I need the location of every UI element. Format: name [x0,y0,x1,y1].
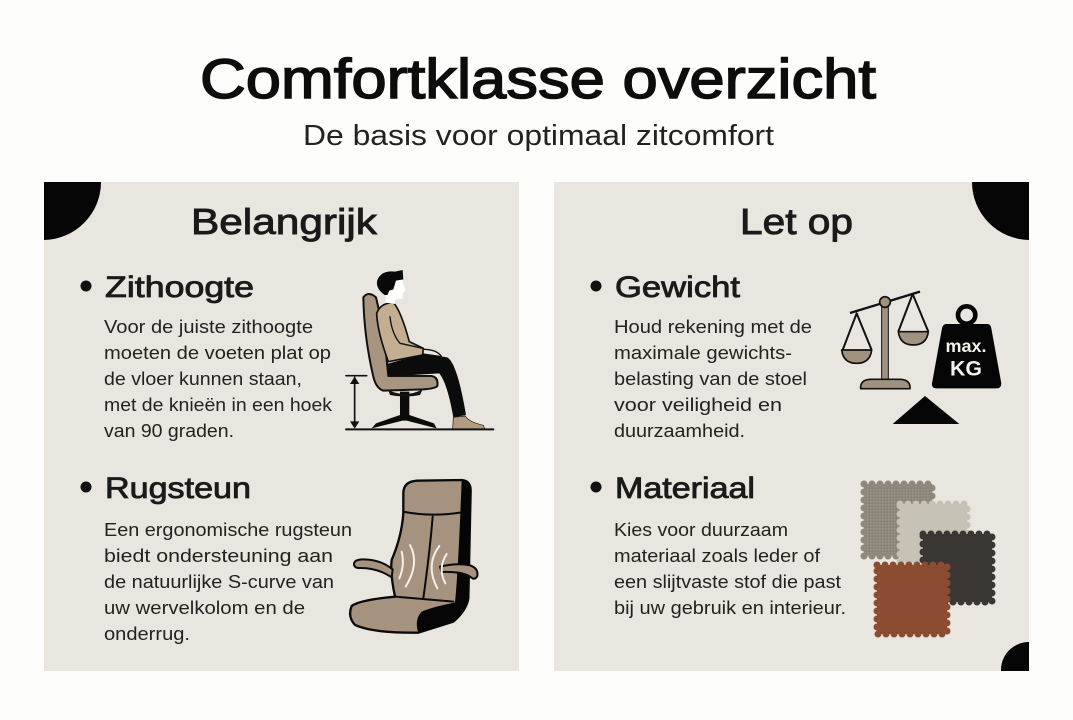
panel: Belangrijk [44,182,519,671]
section: Materiaal: materiaal zoals leder of [614,545,821,566]
section: Materiaal [590,472,846,618]
section: Zithoogte: van 90 graden. [104,420,234,441]
heading: Belangrijk: Belangrijk [191,201,378,242]
corner decoration top left [44,182,101,240]
icon: balance scale and max KG weight: KG [950,356,982,380]
icon: seated person on chair [346,270,493,429]
heading: Let op: Let op [740,201,853,242]
section: Zithoogte: moeten de voeten plat op [104,342,331,363]
subtitle: De basis voor optimaal zitcomfort [303,120,774,152]
title: Comfortklasse overzicht [200,47,876,110]
icon: fabric swatches [864,484,992,634]
icon: balance scale and max KG weight [842,292,1001,424]
section: Rugsteun [80,472,352,644]
section: Zithoogte: de vloer kunnen staan, [104,368,302,389]
section: Gewicht: voor veiligheid en [614,394,782,415]
icon: ergonomic chair back [350,480,477,633]
section: Gewicht: belasting van de stoel [614,368,807,389]
section: Gewicht: duurzaamheid. [614,420,745,441]
section: Materiaal: bij uw gebruik en interieur. [614,597,846,618]
section: Rugsteun: uw wervelkolom en de [104,597,305,618]
section: Rugsteun: Rugsteun [105,472,251,505]
section: Rugsteun: Een ergonomische rugsteun [104,519,352,540]
section: Zithoogte: met de knieën in een hoek [104,394,333,415]
section: Zithoogte: Zithoogte [105,271,254,304]
section: Rugsteun: de natuurlijke S-curve van [104,571,334,592]
section: Materiaal: Kies voor duurzaam [614,519,788,540]
section: Zithoogte: Voor de juiste zithoogte [104,316,313,337]
icon: balance scale and max KG weight: max. [945,336,986,356]
corner decoration bottom right [1001,642,1029,671]
section: Gewicht: Gewicht [615,271,741,304]
section: Zithoogte [80,271,333,441]
section: Materiaal: een slijtvaste stof die past [614,571,841,592]
section: Materiaal: Materiaal [615,472,755,505]
section: Rugsteun: biedt ondersteuning aan [104,545,333,566]
section: Rugsteun: onderrug. [104,623,190,644]
panel: Let op [554,182,1029,671]
section: Gewicht: Houd rekening met de [614,316,812,337]
corner decoration top right [972,182,1029,240]
section: Gewicht: maximale gewichts- [614,342,792,363]
section: Gewicht [590,271,812,441]
